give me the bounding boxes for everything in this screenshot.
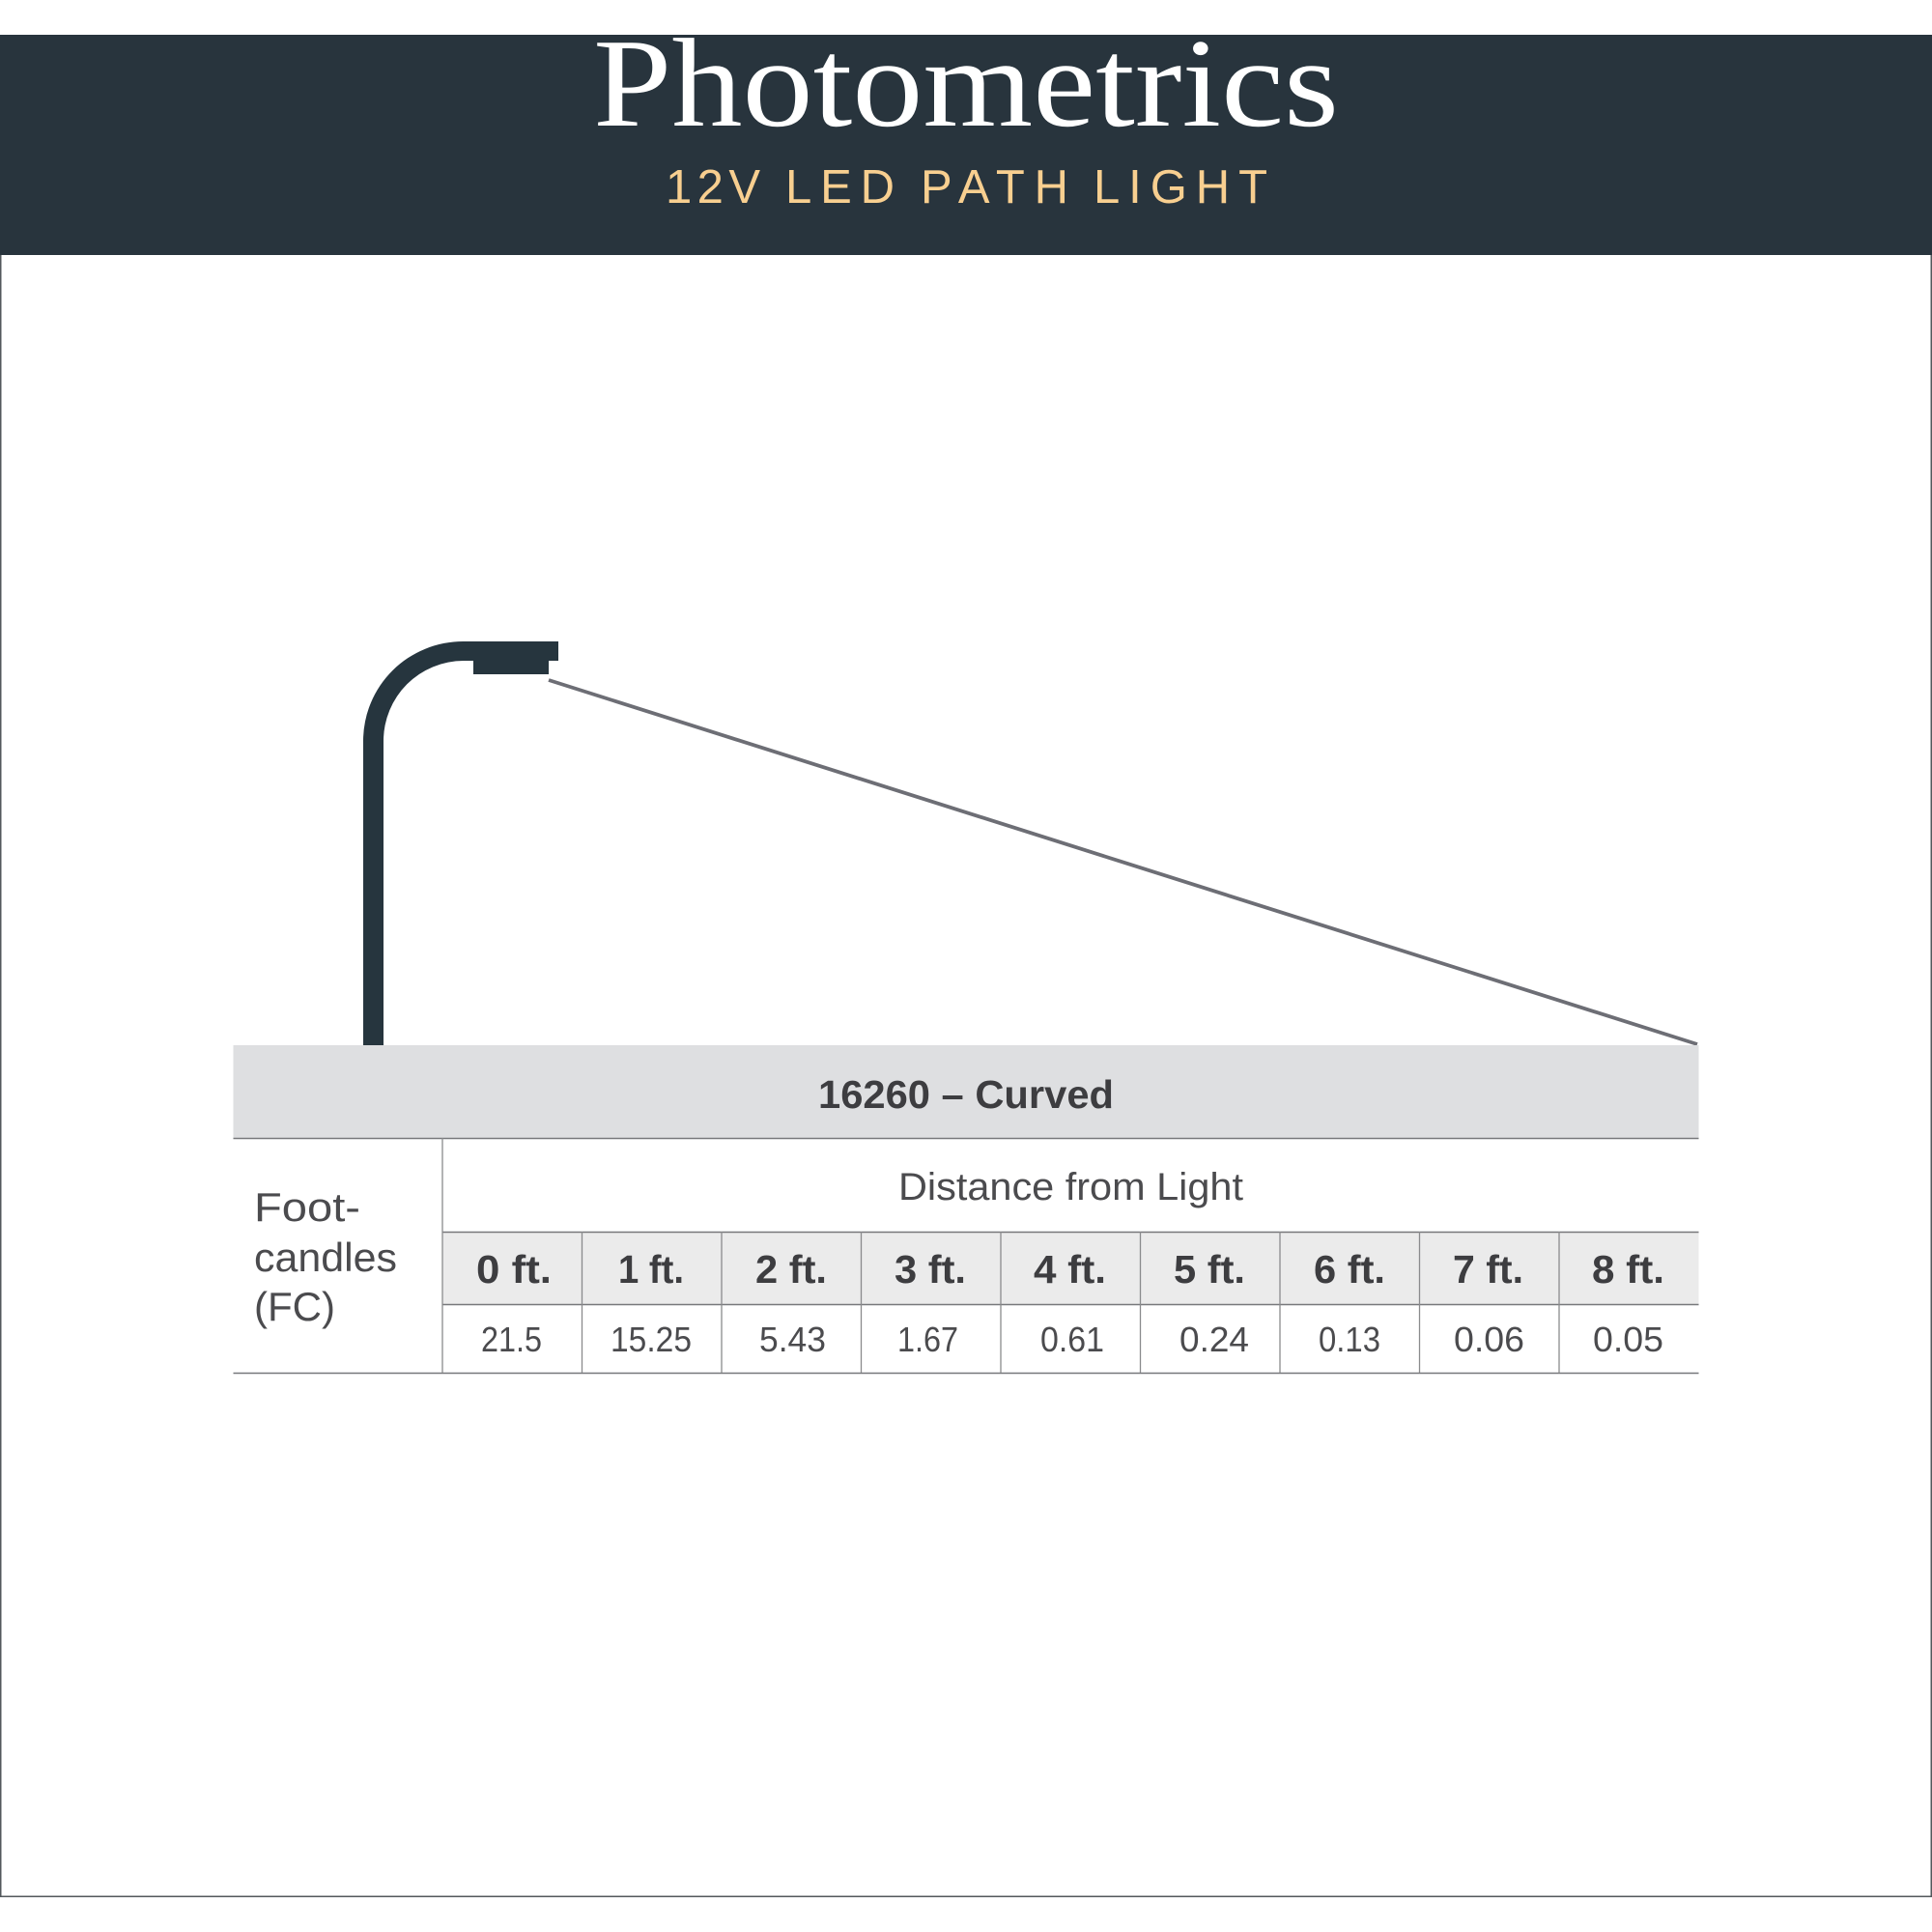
distance header row: 0 ft. (476, 1247, 552, 1292)
distance header row: 8 ft. (1592, 1247, 1664, 1292)
values row: 0.24 (1179, 1320, 1249, 1359)
distance header row: 1 ft. (618, 1247, 684, 1292)
row label: foot-candles: candles (254, 1235, 397, 1280)
values row: 0.13 (1319, 1320, 1380, 1359)
distance header row (442, 1232, 1698, 1304)
values row: 21.5 (481, 1320, 542, 1359)
table title bar: 16260 – Curved (818, 1072, 1114, 1117)
distance header row: 2 ft. (755, 1247, 827, 1292)
distance header row: 3 ft. (895, 1247, 966, 1292)
distance header row: 4 ft. (1034, 1247, 1106, 1292)
row label: foot-candles: (FC) (254, 1284, 335, 1329)
row label: foot-candles (254, 1184, 397, 1329)
values row: 0.05 (1593, 1320, 1663, 1359)
subtitle: 12V (666, 161, 760, 213)
icon: curved path light (363, 641, 558, 1045)
distance header row: 6 ft. (1314, 1247, 1385, 1292)
photometric table (234, 1045, 1698, 1374)
values row: 0.06 (1454, 1320, 1524, 1359)
values row: 1.67 (897, 1320, 958, 1359)
table title bar (234, 1045, 1698, 1138)
values row: 5.43 (759, 1320, 826, 1359)
light beam line (549, 680, 1697, 1044)
subtitle: LIGHT (1094, 161, 1267, 213)
title: Photometrics (593, 14, 1339, 154)
subtitle: LED (785, 161, 895, 213)
distance header row: 7 ft. (1453, 1247, 1523, 1292)
values row: 0.61 (1040, 1320, 1104, 1359)
values row (481, 1320, 1663, 1359)
distance header row: 5 ft. (1174, 1247, 1245, 1292)
distance heading: Distance from Light (898, 1166, 1243, 1208)
row label: foot-candles: Foot- (254, 1184, 360, 1230)
values row: 15.25 (611, 1320, 692, 1359)
subtitle: PATH (921, 161, 1068, 213)
header banner (0, 14, 1932, 255)
